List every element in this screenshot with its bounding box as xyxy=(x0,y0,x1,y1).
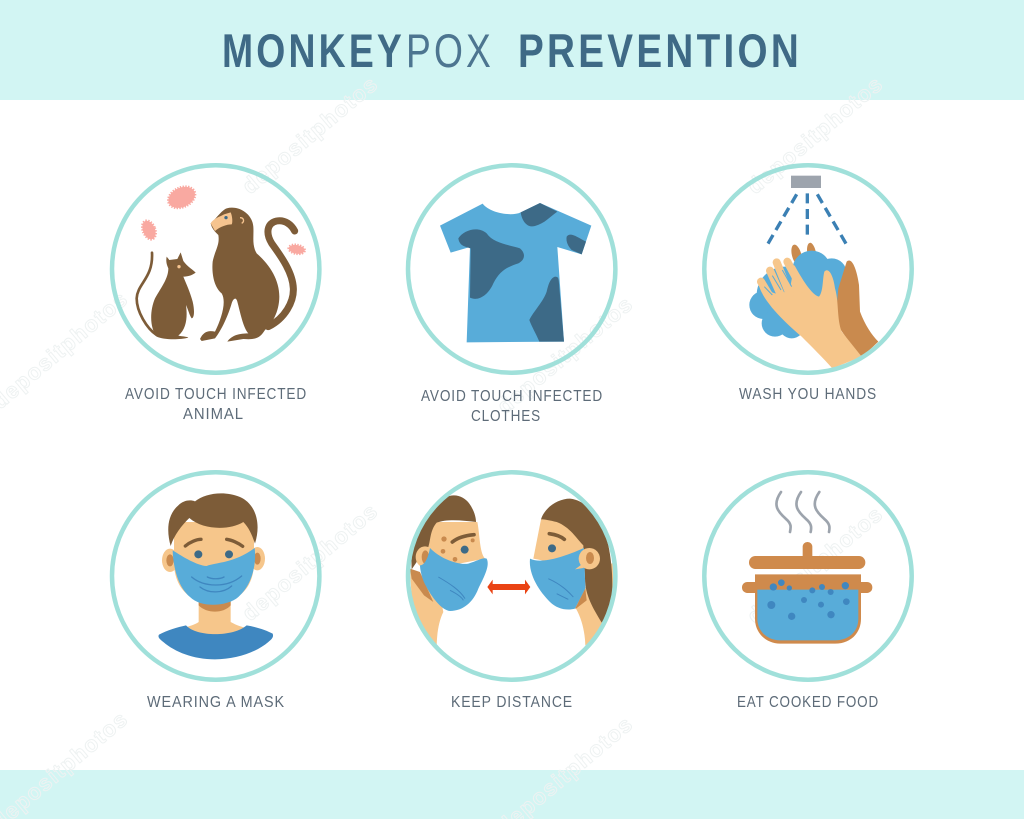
label: EAT COOKED FOOD xyxy=(737,694,879,711)
label: ANIMAL xyxy=(183,406,244,423)
label: CLOTHES xyxy=(471,408,541,425)
label xyxy=(125,386,307,423)
title: PREVENTION xyxy=(518,24,802,77)
icon: two masked faces and arrow xyxy=(410,495,613,649)
ring 6 xyxy=(704,472,912,680)
watermark: depositphotos xyxy=(742,502,887,629)
label: WASH YOU HANDS xyxy=(739,386,877,403)
label: WEARING A MASK xyxy=(147,694,285,711)
icon: stained t-shirt xyxy=(440,203,591,342)
label: AVOID TOUCH INFECTED xyxy=(421,388,603,405)
icon: monkey, rat and germs xyxy=(137,183,305,342)
watermark: depositphotos xyxy=(237,499,382,626)
ring 2 xyxy=(408,165,615,373)
label: KEEP DISTANCE xyxy=(451,694,573,711)
ring 3 xyxy=(704,165,912,373)
footer band xyxy=(0,770,1024,819)
ring 4 xyxy=(112,472,319,680)
panel: eat cooked food xyxy=(704,472,912,711)
icon: boiling pot with steam xyxy=(742,492,872,644)
watermark: depositphotos xyxy=(742,72,887,199)
label xyxy=(421,388,603,425)
panel: keep distance xyxy=(408,472,615,711)
watermark: depositphotos xyxy=(237,72,382,199)
icon: man with mask xyxy=(158,493,273,659)
panel: avoid infected clothes xyxy=(408,165,615,425)
watermark: depositphotos xyxy=(492,292,637,419)
icon: hands under shower xyxy=(749,176,878,368)
title: POX xyxy=(406,24,494,77)
ring 5 xyxy=(408,472,615,680)
watermark xyxy=(0,72,887,819)
header band xyxy=(0,0,1024,100)
ring 1 xyxy=(112,165,319,373)
label: AVOID TOUCH INFECTED xyxy=(125,386,307,403)
title xyxy=(222,24,802,77)
panel: wash hands xyxy=(704,165,912,403)
title: MONKEY xyxy=(222,24,405,77)
panel: avoid infected animal xyxy=(112,165,319,423)
panel: wearing a mask xyxy=(112,472,319,711)
